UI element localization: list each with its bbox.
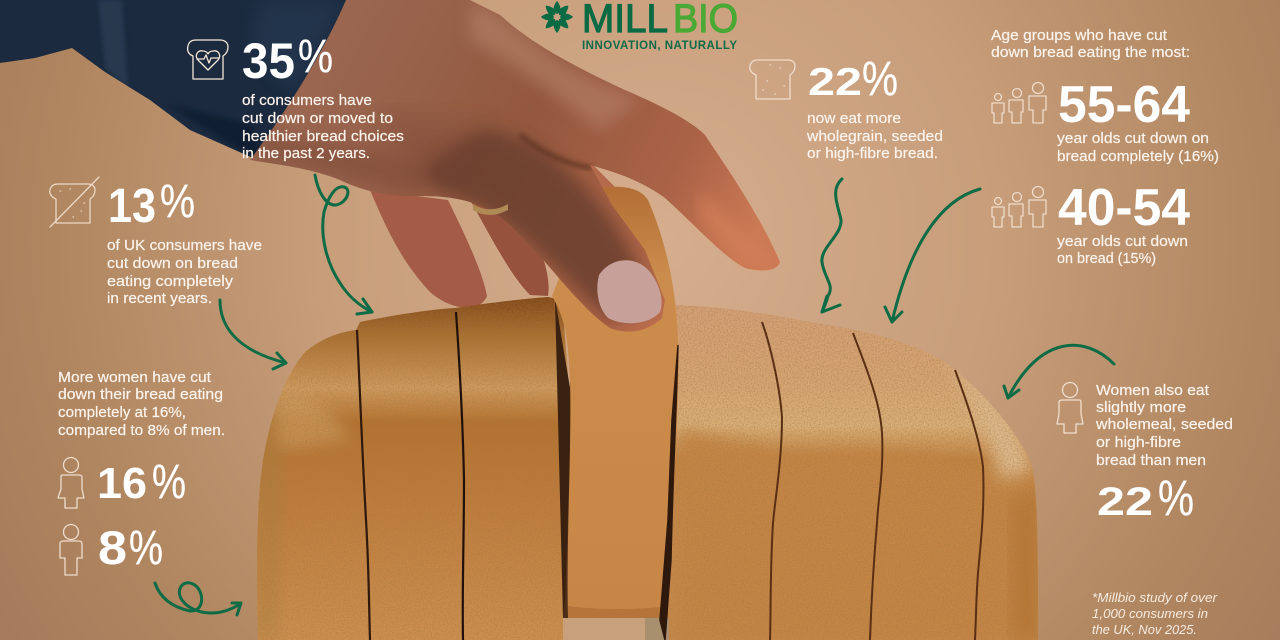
stat: 13% (50, 174, 262, 307)
icon: three people (992, 186, 1046, 227)
description: on bread (15%) (1057, 251, 1156, 267)
figure: % (298, 29, 333, 82)
text: slightly more (1096, 400, 1186, 416)
arrow: women to loaf (155, 583, 241, 615)
figure: % (862, 53, 898, 106)
photo: gap under held slice (563, 618, 669, 640)
figure: % (160, 174, 195, 227)
photo: loaf cut lines right (762, 322, 983, 640)
heading (991, 28, 1190, 61)
icon: crossed-out bread (50, 177, 99, 227)
photo: held slice (552, 187, 678, 640)
text: bread than men (1096, 453, 1206, 469)
photo: denim sleeve (0, 0, 360, 162)
text: completely at 16%, (58, 405, 186, 421)
photo: hand (250, 0, 780, 332)
text (1095, 383, 1233, 469)
photo: loaf left section (250, 290, 580, 640)
figure: 13 (108, 180, 156, 233)
description: cut down on bread (107, 256, 238, 272)
figure: 22%: % (1158, 470, 1194, 526)
heading: Age groups who have cut (991, 28, 1167, 44)
logo tagline: INNOVATION, NATURALLY (582, 40, 737, 52)
logo mark (541, 1, 573, 33)
figure: 16%: % (152, 456, 186, 509)
figure: 22%: 22 (1097, 480, 1153, 524)
text: Women also eat (1096, 383, 1209, 399)
arrow: 35% to loaf (315, 175, 372, 314)
arrow: wavy 22% to loaf (822, 179, 842, 312)
description: or high-fibre bread. (807, 146, 938, 162)
figure: 40-54: 40-54 (1058, 179, 1190, 237)
description (806, 111, 943, 162)
arrow: women wholemeal to loaf (1004, 345, 1114, 398)
description (1057, 234, 1188, 267)
description (242, 93, 404, 162)
logo (541, 0, 738, 52)
figure: 22 (808, 61, 862, 104)
description: bread completely (16%) (1057, 149, 1219, 165)
text: or high-fibre (1096, 435, 1181, 451)
panel: age groups (991, 28, 1219, 267)
icon: three people (992, 82, 1046, 123)
footnote (1092, 590, 1218, 637)
icon: woman (1057, 382, 1083, 433)
figure: 16%: 16 (97, 459, 147, 508)
stat: 35% (188, 29, 404, 162)
icon: man (60, 524, 82, 575)
description (1057, 131, 1219, 165)
description: in the past 2 years. (242, 146, 370, 162)
description: now eat more (807, 111, 901, 127)
footnote: *Millbio study of over (1092, 590, 1218, 605)
figure: 35 (242, 33, 295, 89)
description: healthier bread choices (242, 129, 404, 145)
figure: 8%: % (129, 522, 163, 575)
description: cut down or moved to (242, 111, 393, 127)
description: of UK consumers have (107, 238, 262, 254)
icon: toast with heart (188, 40, 228, 79)
description: wholegrain, seeded (806, 129, 943, 145)
description: eating completely (107, 274, 234, 290)
text: compared to 8% of men. (58, 423, 225, 439)
icon: woman (58, 458, 84, 508)
panel: women wholemeal (1057, 382, 1233, 526)
text: wholemeal, seeded (1095, 417, 1233, 433)
description: in recent years. (107, 291, 212, 307)
arrow: 13% to loaf (220, 300, 286, 369)
description: year olds cut down on (1057, 131, 1209, 147)
figure: 8%: 8 (98, 521, 127, 574)
photo: fingers behind the slice (370, 162, 618, 308)
text (58, 370, 225, 439)
description (107, 238, 262, 307)
icon: bread slice (750, 60, 795, 99)
arrow: age groups to loaf (885, 189, 980, 322)
heading: down bread eating the most: (991, 45, 1190, 61)
panel: women vs men (58, 370, 225, 575)
figure: 55-64: 55-64 (1058, 76, 1190, 134)
description: of consumers have (242, 93, 372, 109)
photo: loaf right section (655, 300, 1050, 640)
description: year olds cut down (1057, 234, 1188, 250)
text: down their bread eating (58, 387, 223, 403)
footnote: 1,000 consumers in (1092, 606, 1208, 621)
text: More women have cut (58, 370, 211, 386)
footnote: the UK, Nov 2025. (1092, 622, 1197, 637)
stat: 22% wholegrain (750, 53, 943, 162)
